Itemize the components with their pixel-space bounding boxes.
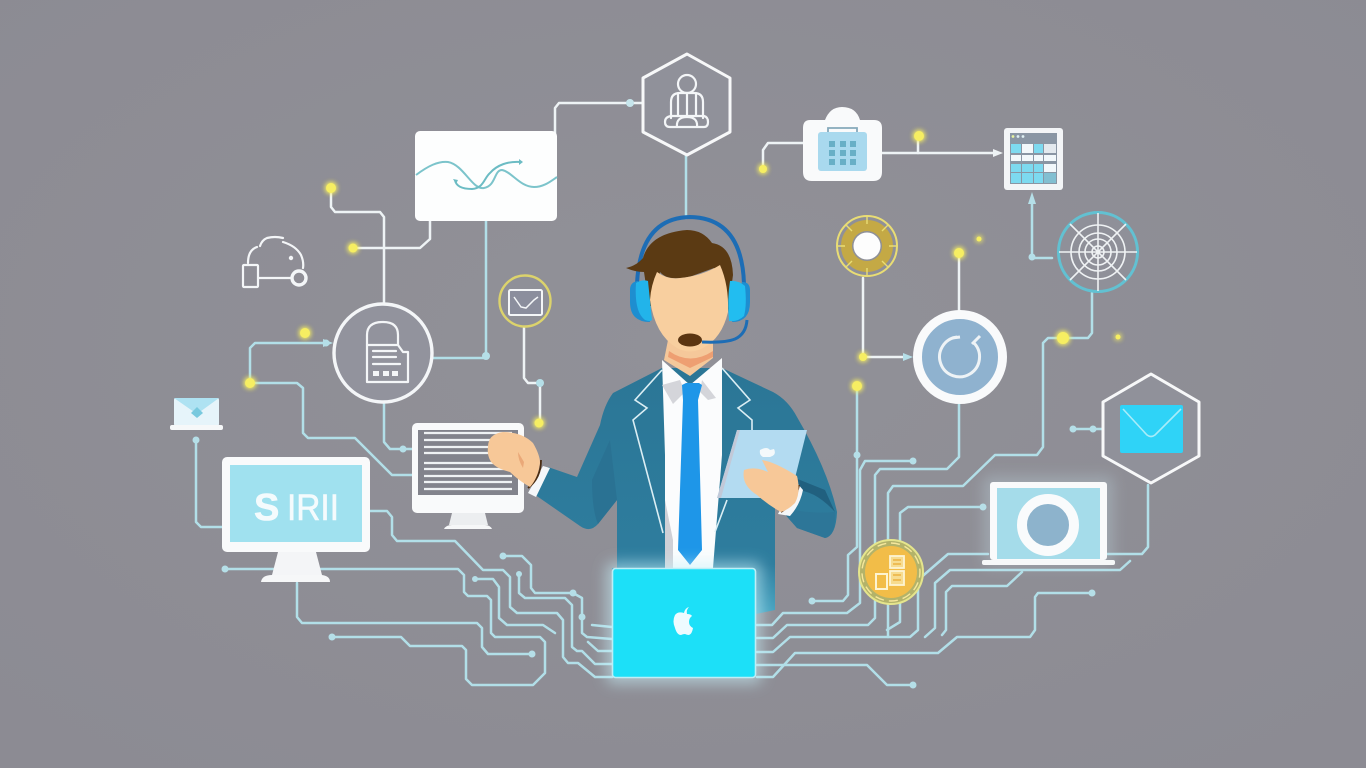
icon: small mail laptop (170, 398, 223, 430)
left cuff (528, 466, 550, 497)
icon: monitor with SIRI text (222, 457, 370, 582)
earcup right (732, 282, 750, 322)
headband (637, 217, 744, 284)
face (650, 265, 728, 352)
glowing yellow nodes (245, 131, 1120, 428)
icon: laptop with ring (982, 476, 1115, 566)
tablet logo (760, 448, 775, 457)
tablet (717, 430, 807, 498)
laptop: glowing cyan (606, 562, 762, 684)
icon: gold ring gear (837, 216, 897, 276)
icon: chart card with waves (415, 131, 557, 221)
icon: person hexagon (643, 54, 730, 155)
right hand (744, 460, 799, 512)
left arm fold (592, 440, 617, 524)
apple logo (674, 607, 693, 635)
icon: yellow ring with chart (500, 276, 550, 326)
tie (678, 383, 702, 565)
shirt (662, 358, 722, 568)
left hand (488, 432, 540, 487)
icon: big blue ring (918, 314, 1002, 400)
icon: mail hexagon (1103, 374, 1199, 483)
icon: outline cloud gadget (243, 237, 306, 287)
left circuit traces (192, 99, 686, 685)
icon: calendar briefcase card (803, 107, 882, 181)
jacket (531, 368, 837, 614)
monitor label text: S (254, 487, 279, 529)
hair back (626, 230, 733, 312)
monitor label text: IRII (287, 487, 339, 528)
lapel lines (633, 368, 752, 533)
headset mic boom (702, 320, 747, 342)
earcup left (630, 281, 650, 322)
right circuit traces (757, 136, 1148, 688)
icon: web radar circle (1058, 212, 1138, 292)
neck (664, 340, 713, 376)
icon: data grid window (1004, 128, 1063, 190)
icon: monitor with text lines (412, 423, 524, 529)
icon: lock and document circle (334, 304, 432, 402)
icon: gold coin chip (859, 540, 923, 604)
person: agent with headset (488, 217, 837, 614)
right cuff (778, 484, 803, 516)
